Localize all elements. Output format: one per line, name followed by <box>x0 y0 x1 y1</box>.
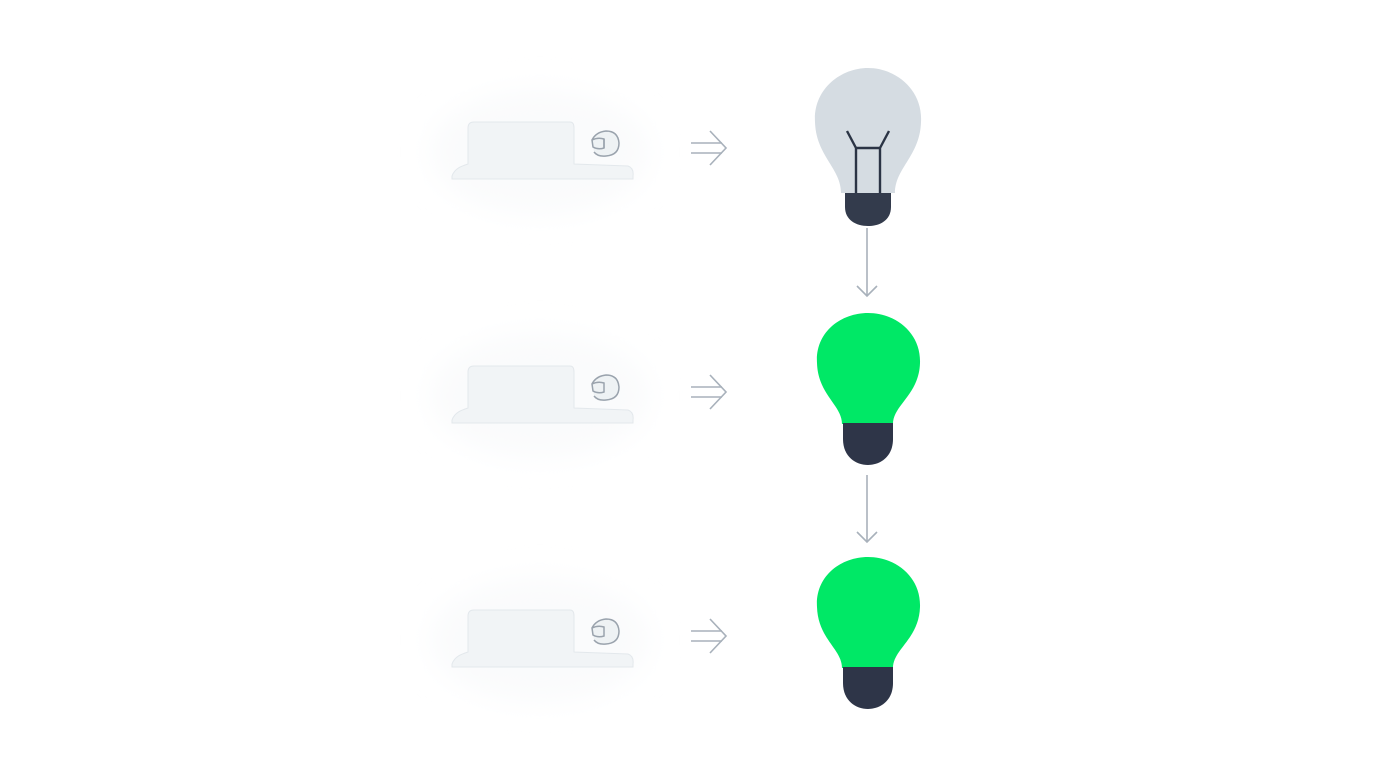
arrow: right double <box>691 131 726 165</box>
icon: small glyph <box>592 619 619 644</box>
soft halo <box>430 90 650 214</box>
icon: light bulb green <box>817 557 920 709</box>
card: placeholder <box>452 610 633 667</box>
arrow: right double <box>691 375 726 409</box>
arrow: down 2 <box>857 475 877 542</box>
card: placeholder <box>452 366 633 423</box>
arrow: down 1 <box>857 228 877 296</box>
icon: small glyph <box>592 375 619 400</box>
icon: light bulb off <box>815 68 921 226</box>
arrow: right double <box>691 619 726 653</box>
icon: small glyph <box>592 131 619 156</box>
row 2 <box>430 313 920 465</box>
soft halo <box>430 578 650 702</box>
soft halo <box>430 334 650 458</box>
icon: light bulb green <box>817 313 920 465</box>
row 1 <box>430 68 921 226</box>
card: placeholder <box>452 122 633 179</box>
row 3 <box>430 557 920 709</box>
